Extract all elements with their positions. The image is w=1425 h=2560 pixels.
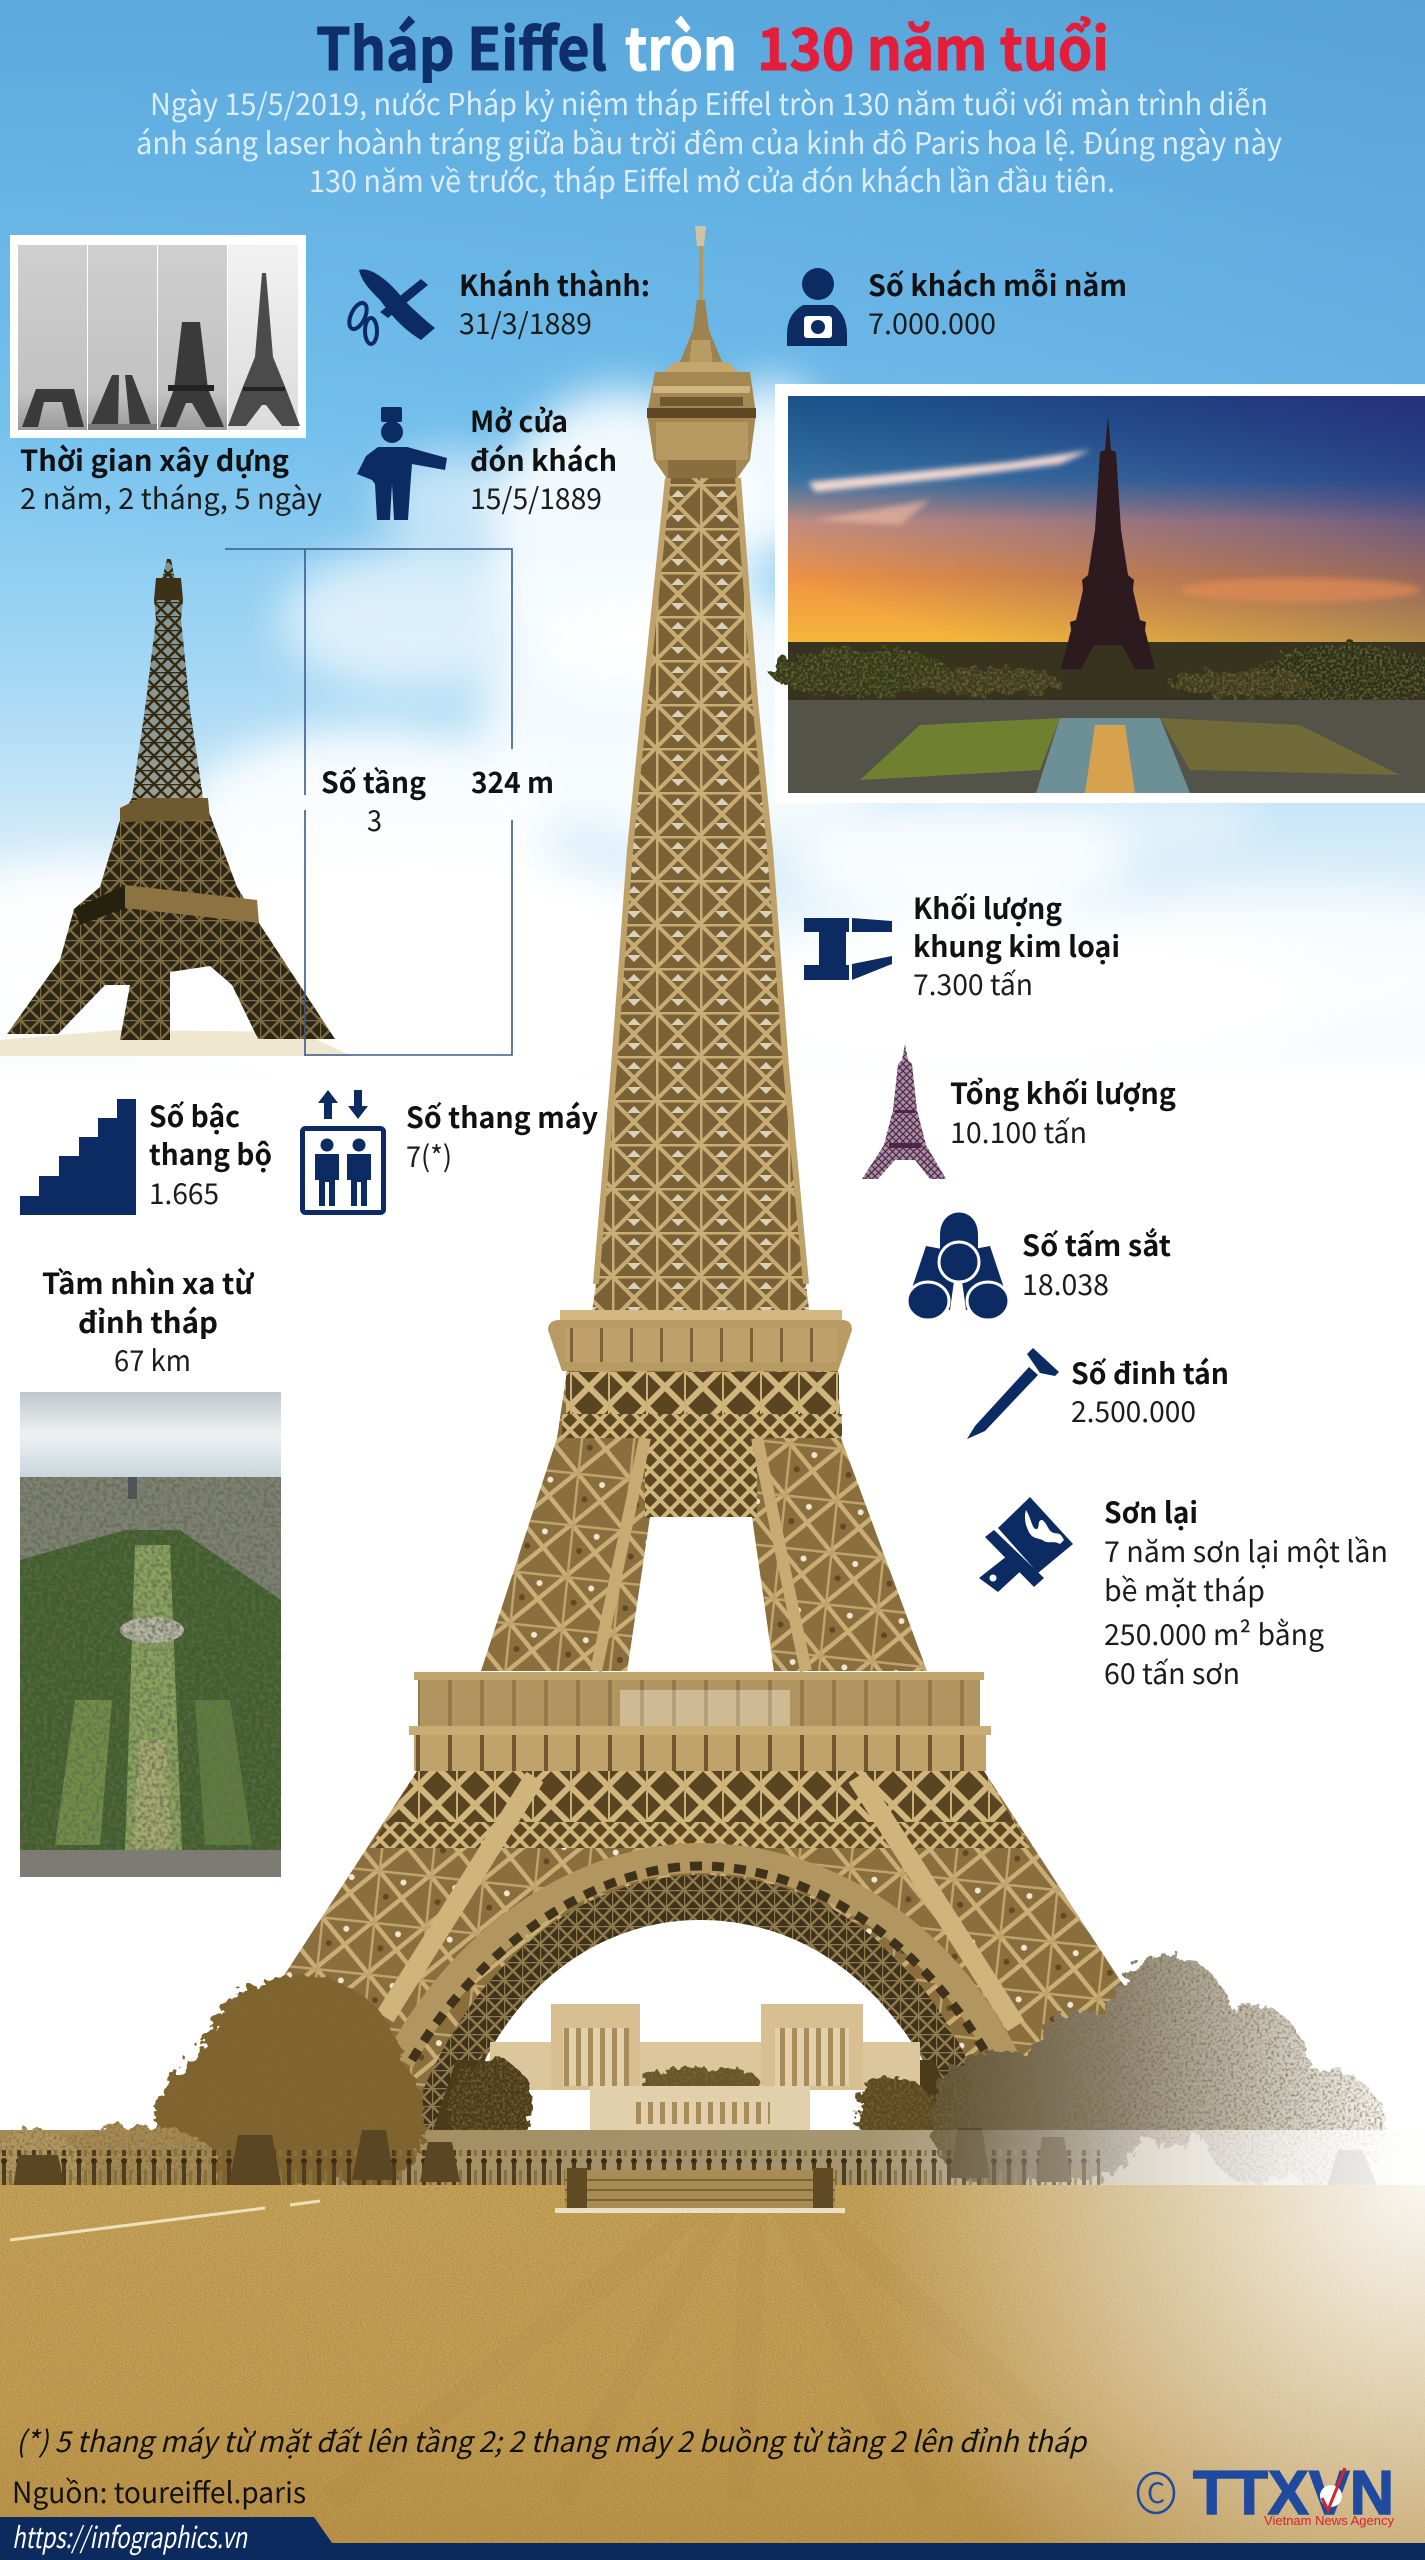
upper shaft see-through lattice [132, 559, 203, 798]
source: Nguồn: toureiffel.paris [12, 2470, 306, 2512]
label: thời gian xây dựng: 2 năm, 2 tháng, 5 ngày [20, 476, 322, 518]
ground fade on the right [860, 2130, 1425, 2560]
icon: steel beam [804, 918, 892, 980]
label: số đinh tán [1071, 1351, 1229, 1431]
crowd and tree trunks [0, 2128, 1388, 2210]
icon: scissors [346, 269, 435, 344]
label: số đinh tán: Số đinh tán [1071, 1351, 1229, 1393]
label: thời gian xây dựng [20, 438, 322, 518]
label: sơn lại: 7 năm sơn lại một lần [1104, 1529, 1388, 1571]
label: mở cửa đón khách: Mở cửa [470, 399, 568, 441]
label: số khách mỗi năm [868, 263, 1127, 343]
icon: iron pipes [907, 1212, 1009, 1320]
upper shaft side rails [596, 478, 806, 1284]
label: sơn lại: Sơn lại [1104, 1490, 1198, 1532]
title: 130 năm tuổi [757, 3, 1109, 87]
small lattice band [562, 1414, 842, 1438]
label: số tấm sắt [1022, 1223, 1171, 1304]
title: Tháp Eiffel [316, 3, 607, 87]
sunset tower silhouette [1061, 416, 1155, 669]
lower legs [7, 798, 335, 1040]
label: tổng khối lượng: Tổng khối lượng [950, 1071, 1176, 1113]
aerial photo of Paris [20, 1392, 281, 1877]
second platform [548, 1310, 852, 1371]
label: tầm nhìn xa: Tầm nhìn xa từ [42, 1261, 255, 1303]
label: số bậc thang bộ: Số bậc [149, 1094, 240, 1136]
label: số tầng [321, 760, 426, 840]
label: số thang máy [406, 1095, 598, 1176]
upper leg opening [627, 1517, 774, 1672]
platforms [120, 798, 210, 822]
label: số tấm sắt: Số tấm sắt [1022, 1223, 1171, 1265]
label: tổng khối lượng: 10.100 tấn [950, 1110, 1087, 1152]
label: số bậc thang bộ [149, 1094, 272, 1213]
label: tầm nhìn xa: đỉnh tháp [78, 1300, 218, 1342]
label: tổng khối lượng [950, 1071, 1176, 1152]
sunset photo [770, 384, 1425, 803]
construction stages photo [10, 235, 306, 438]
label: mở cửa đón khách: 15/5/1889 [470, 476, 602, 518]
TTXVN logo: C [1147, 2472, 1165, 2512]
TTXVN logo: Vietnam News Agency [1264, 2513, 1394, 2528]
height bracket lines [225, 549, 512, 1056]
icon: doorman [357, 407, 447, 520]
stage 4 [228, 245, 300, 430]
label: tầm nhìn xa: 67 km [114, 1338, 191, 1380]
label: số khách mỗi năm: 7.000.000 [868, 301, 996, 343]
great arch [400, 1858, 1005, 2130]
label: số tầng: 3 [367, 798, 382, 840]
label: khánh thành [459, 263, 650, 343]
upper leg inner struts [596, 1438, 806, 1671]
intro text: 130 năm về trước, tháp Eiffel mở cửa đón khách lần đầu tiên. [309, 157, 1115, 201]
label: height: 324 m [471, 760, 554, 802]
tower summit cabin [647, 362, 756, 480]
title: tròn [625, 3, 737, 87]
label: khối lượng khung kim loại: Khối lượng [913, 886, 1062, 928]
label: số đinh tán: 2.500.000 [1071, 1389, 1196, 1431]
main Eiffel tower illustration [215, 226, 1190, 2175]
ground lawn [0, 2185, 1425, 2560]
tower antenna and spire [679, 226, 723, 364]
first platform [409, 1672, 991, 1771]
label: số bậc thang bộ: 1.665 [149, 1171, 219, 1213]
label: mở cửa đón khách: đón khách [470, 438, 617, 480]
lower tower body lattice [215, 1771, 1190, 2170]
lattice band under first platform [386, 1771, 1014, 1822]
intro text [136, 80, 1282, 201]
intro text: ánh sáng laser hoành tráng giữa bầu trời đêm của kinh đô Paris hoa lệ. Đúng ngày này [136, 119, 1282, 163]
arch opening [450, 1920, 958, 2175]
footer bar and url tab [0, 2515, 1425, 2560]
label: số tầng: Số tầng [321, 760, 426, 802]
left dark Eiffel tower photo [0, 559, 352, 1056]
icon: small tower [862, 1044, 946, 1179]
label: số bậc thang bộ: thang bộ [149, 1132, 272, 1174]
stage 2 [88, 245, 157, 430]
intro text: Ngày 15/5/2019, nước Pháp kỷ niệm tháp Eiffel tròn 130 năm tuổi với màn trình diễn [150, 80, 1268, 124]
label: số thang máy: 7(*) [406, 1134, 452, 1176]
icon: paint brush [979, 1497, 1073, 1592]
footer bar and url tab: https://infographics.vn [12, 2515, 248, 2557]
label: số khách mỗi năm: Số khách mỗi năm [868, 263, 1127, 305]
upper legs lattice [481, 1371, 927, 1671]
label: thời gian xây dựng: Thời gian xây dựng [20, 438, 289, 480]
icon: visitor with camera [787, 268, 847, 346]
label: số thang máy: Số thang máy [406, 1095, 598, 1137]
label: sơn lại: 250.000 m² bằng [1104, 1612, 1324, 1654]
stage 3 [158, 245, 227, 430]
stage 1 [18, 245, 87, 430]
label: số tấm sắt: 18.038 [1022, 1262, 1109, 1304]
small lattice band under first platform [370, 1822, 1030, 1848]
label: sơn lại: 60 tấn sơn [1104, 1651, 1240, 1693]
trees right [930, 1955, 1385, 2190]
label: tầm nhìn xa [42, 1261, 255, 1380]
Trocadero buildings under the arch [448, 2004, 935, 2153]
label: sơn lại [1104, 1490, 1388, 1693]
central lattice between upper legs [645, 1438, 757, 1518]
label: khánh thành: Khánh thành: [459, 263, 650, 305]
title [316, 3, 1109, 87]
dark inner leg feet [420, 2060, 980, 2170]
base plinth [0, 1030, 352, 1056]
label: sơn lại: bề mặt tháp [1104, 1568, 1265, 1610]
label: khối lượng khung kim loại [913, 886, 1120, 1004]
TTXVN logo: TTXVN [1193, 2459, 1394, 2528]
diagonal leg struts [385, 1777, 1016, 2026]
upper shaft lattice [591, 478, 810, 1318]
label: khối lượng khung kim loại: khung kim loại [913, 924, 1120, 966]
tree band behind crowd [0, 2130, 1425, 2190]
label: khánh thành: 31/3/1889 [459, 301, 592, 343]
icon: elevator [302, 1090, 384, 1212]
trees left [0, 1975, 425, 2205]
footnote: (*) 5 thang máy từ mặt đất lên tầng 2; 2 thang máy 2 buồng từ tầng 2 lên đỉnh tháp [16, 2419, 1088, 2461]
stairs entrance structure [555, 2168, 845, 2213]
label: mở cửa đón khách [470, 399, 617, 518]
label: khối lượng khung kim loại: 7.300 tấn [913, 962, 1033, 1004]
icon: stairs [20, 1099, 136, 1215]
band under second platform [566, 1372, 839, 1414]
icon: rivet nail [967, 1348, 1059, 1439]
